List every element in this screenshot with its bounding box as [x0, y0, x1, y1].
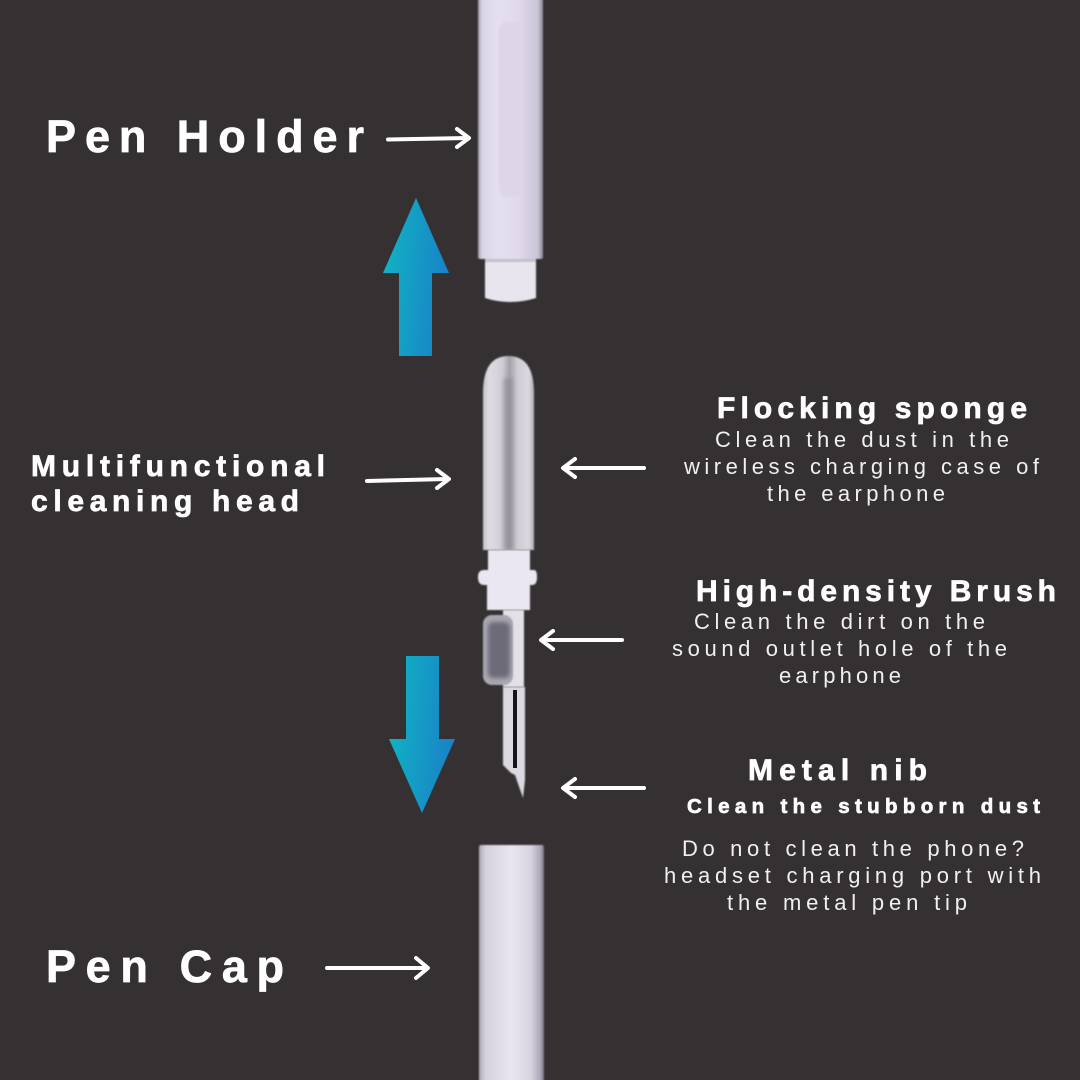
text block: metal nib: Do not clean the phone?	[682, 836, 1024, 861]
text block: flocking sponge: wireless charging case of	[683, 454, 1040, 479]
arrow: flocking sponge	[563, 459, 644, 477]
arrow: pen cap	[327, 958, 428, 978]
text block: metal nib: Metal nib	[748, 754, 927, 787]
brush bristles	[483, 615, 513, 685]
brush stem	[503, 610, 524, 687]
pen holder barrel	[478, 0, 543, 302]
sponge shadow stripe	[503, 378, 513, 550]
arrow: brush	[541, 631, 622, 649]
text block: metal nib	[664, 754, 1041, 915]
cleaning head	[478, 356, 537, 798]
label: multifunctional cleaning head	[31, 450, 325, 518]
text block: high-density brush: High-density Brush	[696, 575, 1056, 608]
text block: metal nib: Clean the stubborn dust	[687, 795, 1040, 818]
text block: flocking sponge: the earphone	[767, 481, 945, 506]
text block: flocking sponge	[683, 392, 1040, 506]
arrow: metal nib	[563, 779, 644, 797]
metal nib	[503, 687, 525, 798]
text block: flocking sponge: Flocking sponge	[717, 392, 1027, 425]
text block: flocking sponge: Clean the dust in the	[715, 427, 1009, 452]
text block: metal nib: the metal pen tip	[727, 890, 967, 915]
arrow: pen holder	[388, 129, 469, 147]
title: Pen Holder: Pen Holder	[46, 111, 364, 162]
collar	[478, 550, 537, 610]
text block: high-density brush	[672, 575, 1056, 688]
text block: metal nib: headset charging port with	[664, 863, 1041, 888]
label: multifunctional cleaning head: Multifunctional	[31, 450, 325, 483]
label: multifunctional cleaning head: cleaning head	[31, 485, 299, 518]
flocking sponge tip	[483, 356, 534, 550]
text block: high-density brush: earphone	[779, 663, 901, 688]
metal nib slot	[513, 690, 517, 768]
title: Pen Cap: Pen Cap	[46, 941, 284, 992]
icon: blue down arrow	[389, 656, 455, 813]
text block: high-density brush: sound outlet hole of the	[672, 636, 1007, 661]
icon: blue up arrow	[383, 198, 449, 356]
pen cap barrel	[479, 845, 544, 1080]
bristle core	[488, 622, 510, 678]
arrow: cleaning head	[367, 470, 449, 488]
text block: high-density brush: Clean the dirt on the	[694, 609, 985, 634]
